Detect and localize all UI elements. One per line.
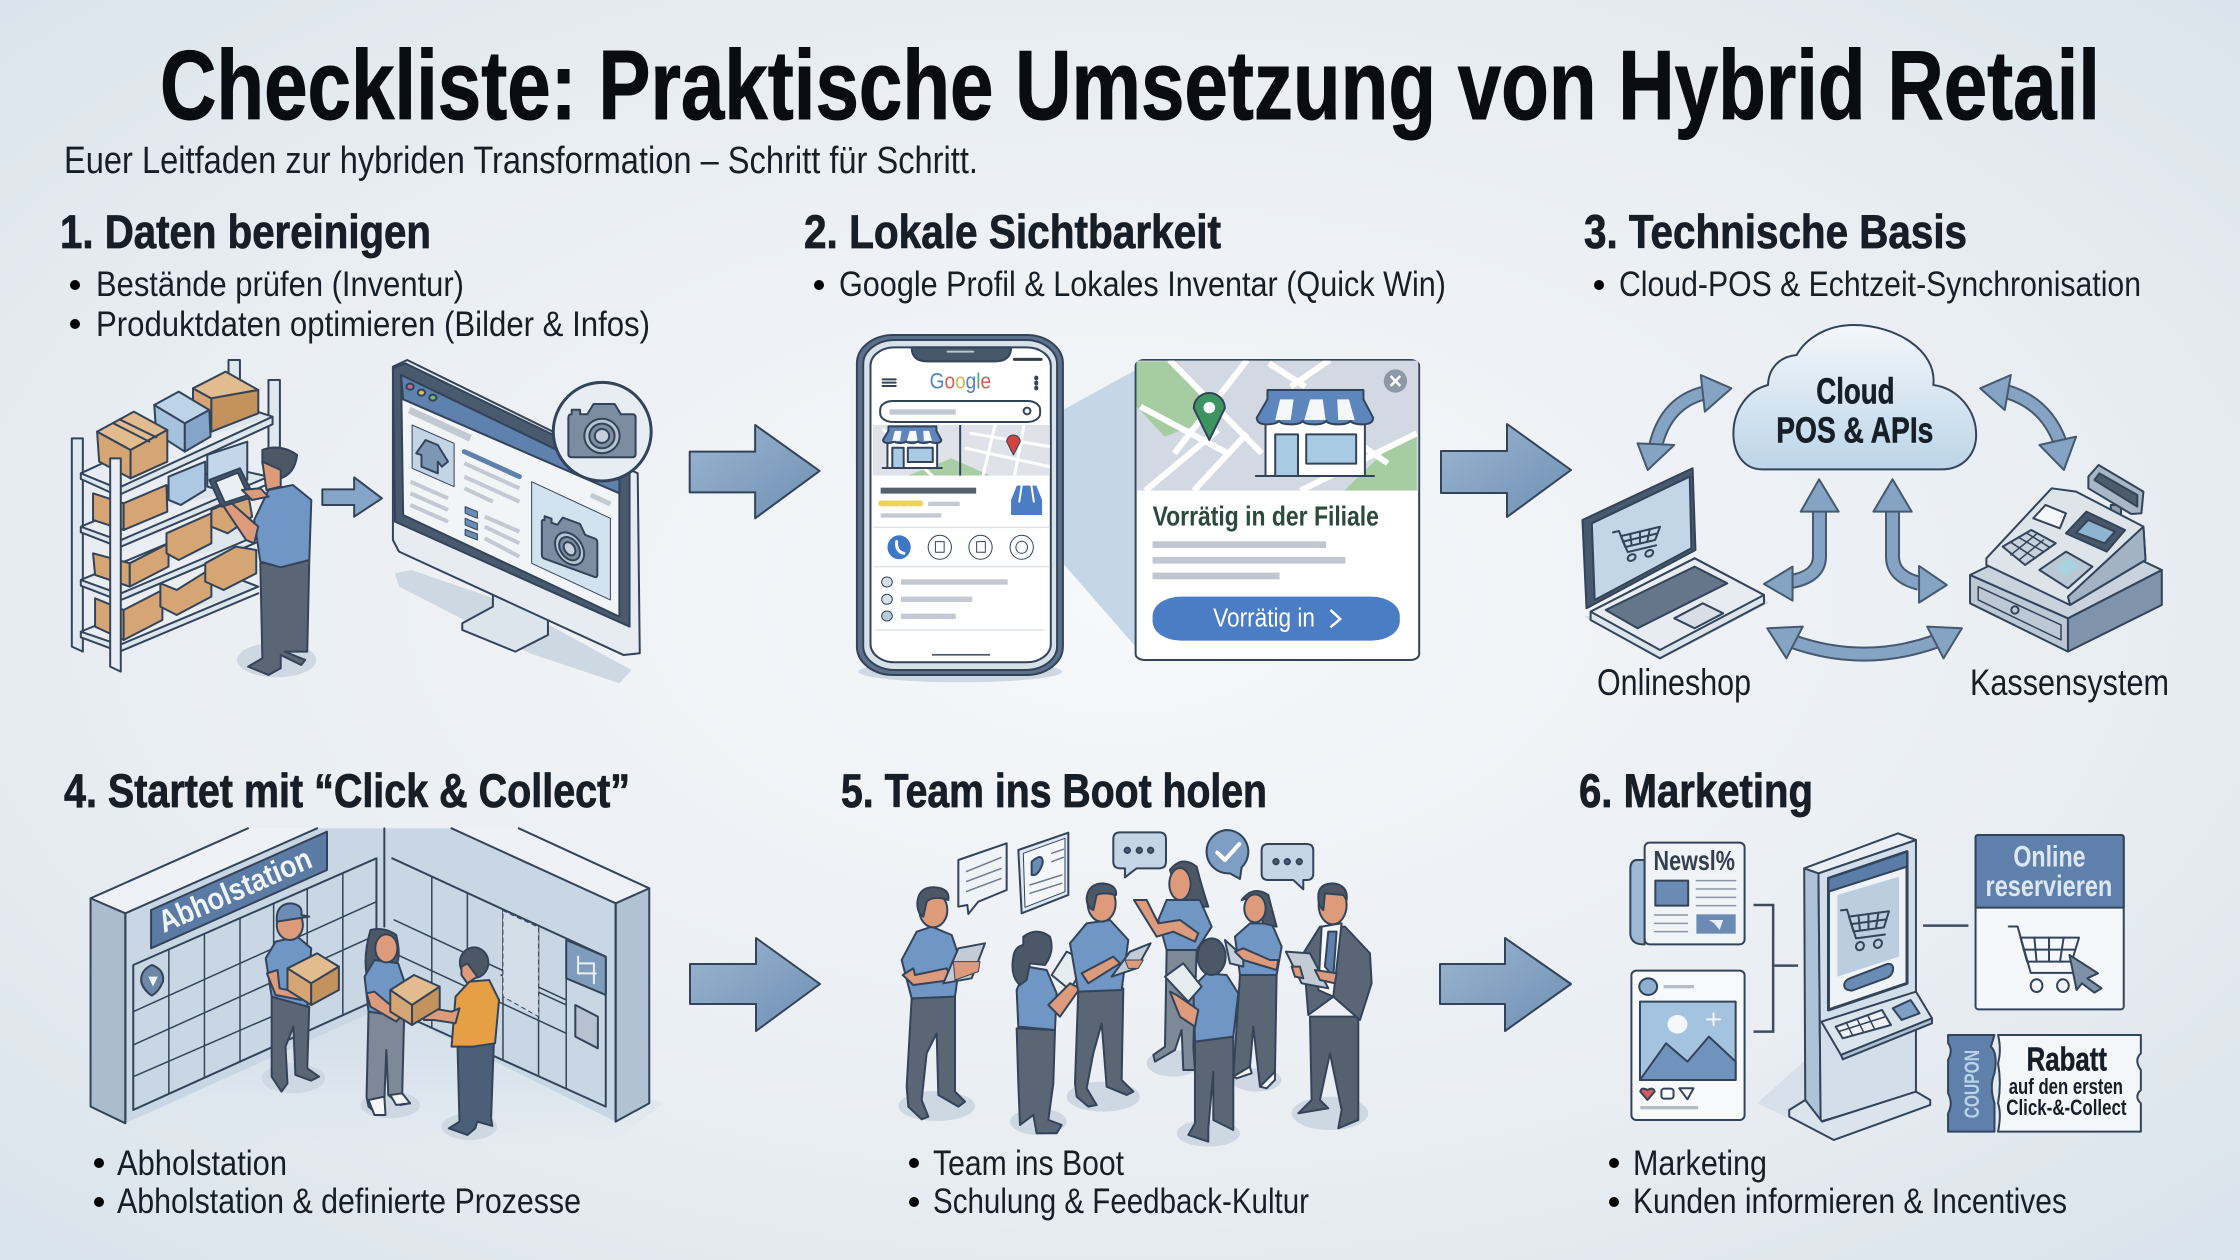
icon: warehouse shelf [72, 360, 280, 672]
illustration: pickup station [86, 828, 663, 1150]
heading 5: 5. Team ins Boot holen [841, 764, 1267, 817]
bullets 5: Schulung & Feedback-Kultur [933, 1182, 1309, 1221]
card: Vorrätig in der Filiale [1136, 360, 1419, 660]
icon: laptop [1582, 468, 1768, 660]
bullets 5: Team ins Boot [933, 1144, 1124, 1183]
panel 1: Daten bereinigen [60, 205, 651, 683]
bullets 4: Abholstation [117, 1144, 287, 1183]
card: Online reservieren: Online [2013, 841, 2086, 873]
heading 2: 2. Lokale Sichtbarkeit [804, 205, 1221, 258]
subtitle: Euer Leitfaden zur hybriden Transformation – Schritt für Schritt. [64, 140, 978, 182]
bullets 4: Abholstation & definierte Prozesse [117, 1182, 581, 1221]
Google wordmark: Google [930, 368, 991, 393]
coupon: Rabatt: Rabatt [2027, 1042, 2107, 1078]
bullets 4 [94, 1144, 581, 1221]
figure: team member 4 [1134, 862, 1212, 1077]
icon: newsletter [1630, 843, 1745, 944]
illustration: phone and store card [857, 335, 1419, 682]
arrow: step 2 to step 3 [1441, 424, 1571, 517]
card: Online reservieren [1976, 835, 2124, 1009]
coupon: Rabatt: Click-&-Collect [2006, 1095, 2127, 1120]
figure: team member 3 [1067, 883, 1151, 1112]
panel 6: Marketing [1579, 764, 2141, 1221]
figure: team member 5 [1165, 938, 1240, 1147]
heading 1: 1. Daten bereinigen [60, 205, 431, 258]
speech bubbles and documents [958, 830, 1313, 914]
button: Vorrätig in [1153, 597, 1400, 641]
bullets 1 [70, 265, 650, 344]
icon: employee with tablet [209, 448, 316, 677]
locker walls [86, 828, 663, 1150]
icon: cloud: Cloud [1816, 371, 1895, 411]
heading 4: 4. Startet mit “Click & Collect” [64, 764, 630, 817]
arrow: step 1 to step 2 [690, 425, 820, 518]
icon: cloud: POS & APIs [1776, 410, 1933, 451]
bullets 6: Kunden informieren & Incentives [1633, 1182, 2067, 1221]
icon: smartphone with Google profile [857, 335, 1063, 682]
heading 3: 3. Technische Basis [1584, 205, 1967, 258]
panel 3: Technische Basis [1582, 205, 2169, 703]
bullets 6: Marketing [1633, 1144, 1767, 1183]
coupon: Rabatt [1948, 1035, 2141, 1132]
arrow: step 4 to step 5 [690, 938, 820, 1031]
zoom beam [1063, 370, 1136, 647]
heading 6: 6. Marketing [1579, 764, 1813, 817]
icon: cash register [1970, 465, 2162, 652]
bullets 1: Produktdaten optimieren (Bilder & Infos) [96, 305, 650, 344]
panel 4: Click & Collect [64, 764, 663, 1221]
illustration: shelf and monitor [72, 360, 651, 683]
icon: cloud [1733, 325, 1976, 469]
button: Vorrätig in: Vorrätig in [1213, 603, 1315, 632]
label: Kassensystem: Kassensystem [1970, 662, 2169, 703]
panel 5: Team ins Boot holen [841, 764, 1372, 1221]
coupon: Rabatt: auf den ersten [2009, 1074, 2123, 1099]
arrow: shelf to monitor [322, 477, 382, 517]
figure: team member 2 [1010, 932, 1087, 1135]
icon: monitor with product page [393, 360, 651, 683]
card: Vorrätig in der Filiale: Vorrätig in der Filiale [1153, 501, 1379, 532]
icon: newsletter: Newsl% [1654, 846, 1735, 877]
bullets 5 [909, 1144, 1309, 1221]
arrow: step 5 to step 6 [1440, 938, 1571, 1031]
bullet 3: Cloud-POS & Echtzeit-Synchronisation [1619, 265, 2141, 304]
card: Online reservieren: reservieren [1986, 870, 2112, 903]
figure: employee handing parcel [361, 929, 420, 1118]
diagram: cloud sync [1582, 325, 2162, 660]
sync arrows [1638, 375, 2076, 658]
label: Onlineshop: Onlineshop [1597, 662, 1751, 703]
icon: social media post [1631, 971, 1745, 1120]
figure: manager in suit [1286, 883, 1372, 1130]
figure: team member 1 [898, 887, 985, 1121]
figure: courier with parcel [262, 903, 339, 1093]
illustration: marketing channels [1630, 833, 2141, 1140]
icon: kiosk terminal [1757, 833, 1932, 1140]
illustration: team discussion [898, 830, 1372, 1147]
coupon: Rabatt: COUPON [1961, 1050, 1984, 1118]
bullets 6 [1609, 1144, 2067, 1221]
figure: team member 6 [1225, 891, 1282, 1092]
bullet 2: Google Profil & Lokales Inventar (Quick Win) [839, 265, 1446, 304]
figure: customer in orange [424, 947, 499, 1140]
panel 2: Lokale Sichtbarkeit [804, 205, 1446, 682]
icon: parcel handed over [390, 975, 440, 1025]
bullets 1: Bestände prüfen (Inventur) [96, 265, 464, 304]
sign: Abholstation: Abholstation [149, 842, 319, 939]
connectors [1754, 905, 1968, 1032]
